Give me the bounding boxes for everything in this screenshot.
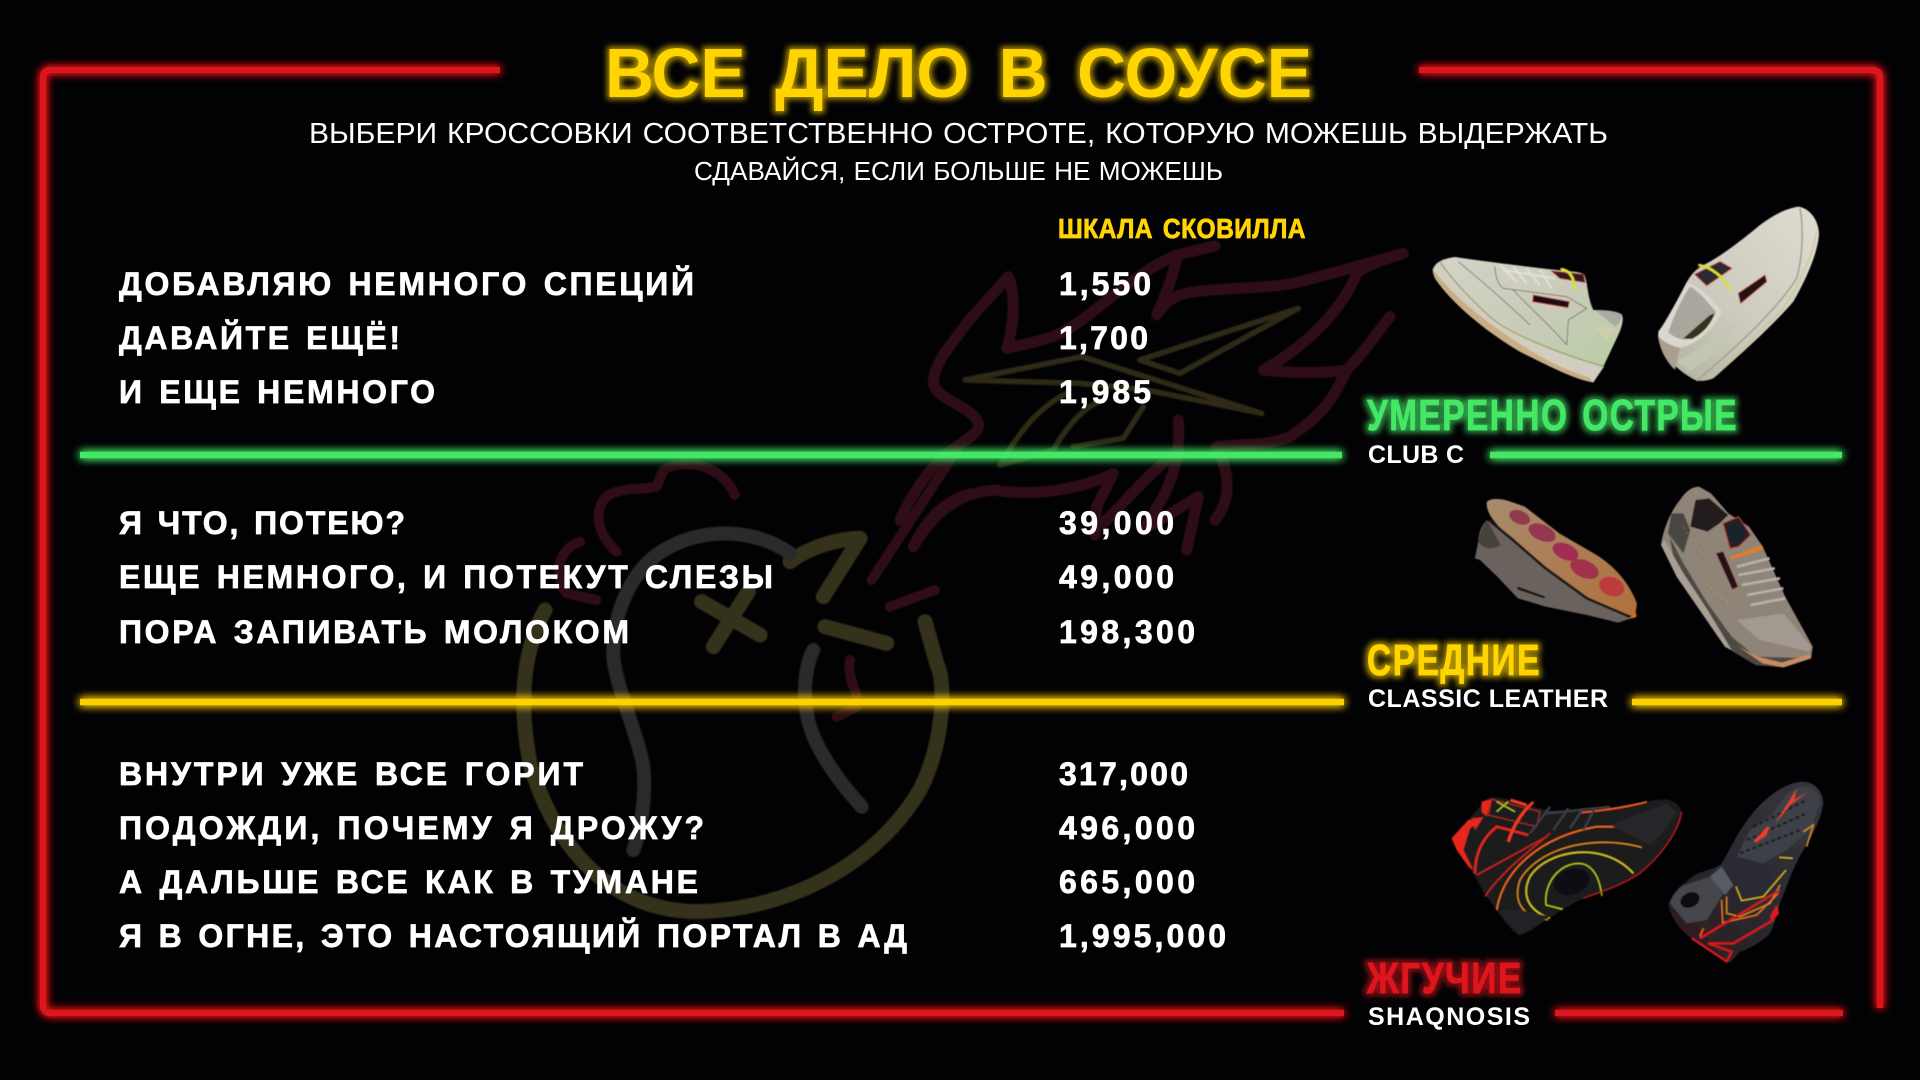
sneakers: Shaqnosis xyxy=(1452,782,1823,963)
category: hot xyxy=(1366,954,1530,1031)
subtitle: ВЫБЕРИ КРОССОВКИ СООТВЕТСТВЕННО ОСТРОТЕ, КОТОРУЮ МОЖЕШЬ ВЫДЕРЖАТЬ xyxy=(309,118,1608,150)
chili inner contour xyxy=(613,534,862,850)
row: ПОДОЖДИ, ПОЧЕМУ Я ДРОЖУ? xyxy=(119,810,704,846)
row xyxy=(119,810,1195,846)
row xyxy=(119,559,1174,595)
row xyxy=(119,614,1195,650)
sneakers: Club C xyxy=(1433,207,1819,382)
chili eyes xyxy=(702,538,887,647)
row: 1,700 xyxy=(1059,320,1148,356)
row: А ДАЛЬШЕ ВСЕ КАК В ТУМАНЕ xyxy=(119,864,698,900)
chili stem xyxy=(559,450,970,717)
sneaker side view xyxy=(1452,797,1682,935)
row: 49,000 xyxy=(1059,559,1174,595)
flame inner lines xyxy=(965,308,1298,465)
flame outline xyxy=(900,246,1403,550)
row: ЕЩЕ НЕМНОГО, И ПОТЕКУТ СЛЕЗЫ xyxy=(119,559,773,595)
green divider xyxy=(80,452,1842,458)
row xyxy=(119,374,1151,410)
sneaker name: SHAQNOSIS xyxy=(1368,1003,1530,1031)
row: ДАВАЙТЕ ЕЩЁ! xyxy=(119,320,400,356)
row: Я В ОГНЕ, ЭТО НАСТОЯЩИЙ ПОРТАЛ В АД xyxy=(119,918,907,954)
heading: УМЕРЕННО ОСТРЫЕ xyxy=(1367,391,1738,440)
row xyxy=(119,505,1174,541)
row xyxy=(119,320,1148,356)
row: И ЕЩЕ НЕМНОГО xyxy=(119,374,435,410)
watermark: flame xyxy=(900,246,1403,550)
row xyxy=(119,266,1151,302)
row: 1,985 xyxy=(1059,374,1151,410)
row: 496,000 xyxy=(1059,810,1195,846)
sneaker side view xyxy=(1433,257,1623,382)
sneaker name: CLUB C xyxy=(1368,441,1464,469)
scale column heading: ШКАЛА СКОВИЛЛА xyxy=(1058,213,1306,244)
sneaker top view xyxy=(1658,207,1819,381)
sneaker sole view xyxy=(1668,782,1823,963)
row: ДОБАВЛЯЮ НЕМНОГО СПЕЦИЙ xyxy=(119,266,694,302)
sneaker top view xyxy=(1661,487,1813,667)
chili outline xyxy=(524,610,942,912)
row: 198,300 xyxy=(1059,614,1195,650)
mild rows xyxy=(119,266,1151,410)
row: 39,000 xyxy=(1059,505,1174,541)
sneaker name: CLASSIC LEATHER xyxy=(1368,685,1608,713)
yellow divider xyxy=(80,699,1842,705)
watermark: chili face xyxy=(524,450,970,912)
row: 1,995,000 xyxy=(1059,918,1226,954)
hot rows xyxy=(119,756,1226,954)
row: 317,000 xyxy=(1059,756,1188,792)
row: Я ЧТО, ПОТЕЮ? xyxy=(119,505,405,541)
title: ВСЕ ДЕЛО В СОУСЕ xyxy=(605,34,1312,112)
row xyxy=(119,756,1188,792)
row: ВНУТРИ УЖЕ ВСЕ ГОРИТ xyxy=(119,756,583,792)
row: 665,000 xyxy=(1059,864,1195,900)
category: mild xyxy=(1367,391,1738,469)
heading: СРЕДНИЕ xyxy=(1367,636,1541,685)
row xyxy=(119,864,1195,900)
medium rows xyxy=(119,505,1195,650)
row: 1,550 xyxy=(1059,266,1151,302)
heading: ЖГУЧИЕ xyxy=(1366,954,1523,1003)
category: medium xyxy=(1367,636,1608,713)
row: ПОРА ЗАПИВАТЬ МОЛОКОМ xyxy=(119,614,629,650)
sneakers: Classic Leather xyxy=(1475,487,1813,667)
sneaker sole view xyxy=(1475,499,1637,623)
subtitle line 2: СДАВАЙСЯ, ЕСЛИ БОЛЬШЕ НЕ МОЖЕШЬ xyxy=(694,156,1223,186)
